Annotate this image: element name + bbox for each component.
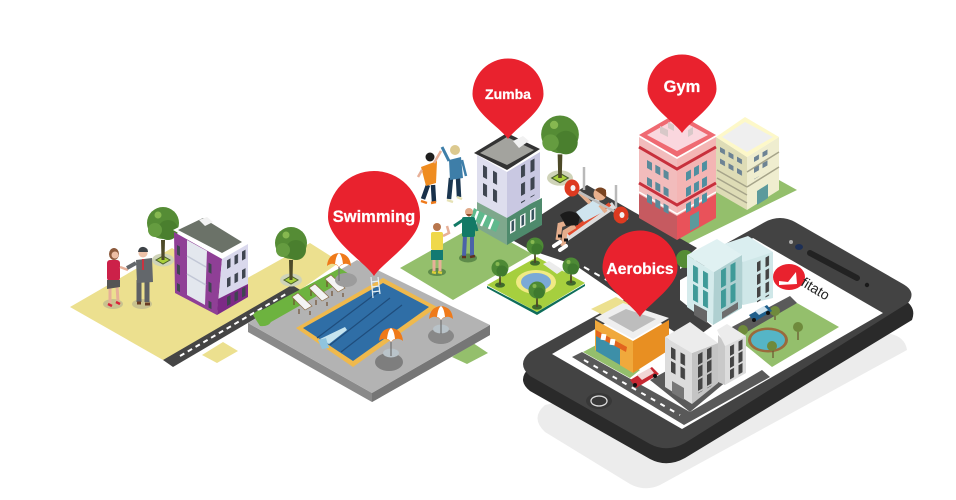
roof unit xyxy=(199,217,213,226)
pin: zumba: Zumba xyxy=(485,86,531,102)
shorts xyxy=(560,211,580,226)
pool water xyxy=(303,283,429,361)
deck sides xyxy=(248,323,490,402)
roof rim xyxy=(474,133,540,170)
pin: gym xyxy=(648,55,716,133)
upper right windows xyxy=(520,158,535,204)
bearded man in teal xyxy=(454,208,477,262)
store right wall xyxy=(633,320,669,373)
umbrella and table 2 xyxy=(428,306,454,344)
pin: aerobics xyxy=(602,231,678,317)
road: left street xyxy=(163,285,302,367)
right windows xyxy=(697,346,713,394)
roof xyxy=(173,215,248,257)
cream door xyxy=(757,184,768,205)
lane lines xyxy=(317,292,402,352)
torso xyxy=(576,197,603,222)
roof panels xyxy=(660,122,693,137)
left wall xyxy=(639,137,677,216)
gym right windows xyxy=(685,159,709,214)
ground: small yellow patch xyxy=(202,342,238,363)
door xyxy=(690,211,699,231)
left windows xyxy=(670,346,686,381)
tree by road xyxy=(275,227,307,286)
diving board xyxy=(318,327,347,349)
weight plates xyxy=(564,180,580,196)
store roof xyxy=(595,303,669,339)
dancer in orange xyxy=(418,151,441,203)
ground: yellow plot xyxy=(70,243,340,360)
yellow strip behind store xyxy=(591,297,630,316)
arms xyxy=(579,192,606,212)
roof xyxy=(480,137,534,165)
cream building xyxy=(716,117,779,210)
teal building rear xyxy=(718,236,773,305)
awning xyxy=(596,330,627,352)
screen map: gym lawn and pond xyxy=(730,296,839,367)
dancer in blue xyxy=(442,145,466,202)
umbrella and table 3 xyxy=(375,328,403,371)
tree behind zumba xyxy=(541,115,579,186)
fountain pond xyxy=(516,270,556,294)
tree left xyxy=(147,207,179,266)
pool rim xyxy=(296,278,437,367)
shop windows xyxy=(509,207,536,237)
park lawn xyxy=(487,257,585,312)
upper left wall xyxy=(477,155,507,218)
pin: swimming xyxy=(328,171,420,276)
logo xyxy=(773,264,833,303)
cream right windows xyxy=(753,147,771,180)
ladder xyxy=(371,277,380,298)
teal building front xyxy=(687,239,742,325)
blue car xyxy=(749,305,772,322)
head xyxy=(594,188,606,200)
park edge xyxy=(487,284,585,315)
bench frame xyxy=(566,205,614,238)
pin: gym: Gym xyxy=(664,78,700,96)
orange store xyxy=(595,303,669,373)
awning xyxy=(470,208,500,232)
gym left windows xyxy=(646,159,670,218)
cream left windows xyxy=(719,146,743,179)
rear windows xyxy=(756,255,770,303)
phone body xyxy=(523,218,913,463)
right wall xyxy=(677,137,716,216)
green hedge xyxy=(253,268,352,326)
upper right wall xyxy=(507,152,540,218)
stripes xyxy=(639,147,716,205)
umbrella and table 1 xyxy=(327,253,357,287)
home button xyxy=(586,393,612,409)
pin: swimming: Swimming xyxy=(333,208,415,226)
ground: green lawn centre xyxy=(400,224,532,300)
left windows xyxy=(692,264,709,312)
ground: green lawn behind gym xyxy=(640,175,797,244)
road: central dark plaza xyxy=(507,185,712,342)
man in yellow top xyxy=(428,223,449,276)
roof xyxy=(647,118,708,151)
store left wall xyxy=(595,320,633,373)
lower floor xyxy=(477,200,507,245)
purple building xyxy=(173,215,248,315)
bench xyxy=(543,261,563,274)
tree behind teal building xyxy=(676,250,694,268)
right face xyxy=(217,244,248,315)
phone face xyxy=(523,218,912,448)
phone side xyxy=(523,233,913,463)
right windows xyxy=(720,261,737,310)
pin: zumba xyxy=(472,58,544,139)
weightlifter on bench xyxy=(554,167,628,250)
deck top xyxy=(248,260,490,393)
upper left windows xyxy=(482,164,498,205)
ground: small green patch xyxy=(452,343,488,364)
roof rim xyxy=(639,113,716,157)
park xyxy=(487,238,585,315)
camera and speaker xyxy=(789,240,869,287)
pool deck xyxy=(248,260,490,402)
red car xyxy=(630,367,659,388)
loungers xyxy=(292,275,345,315)
rear windows xyxy=(729,339,743,380)
phone screen xyxy=(552,238,883,429)
pink gym building xyxy=(639,113,716,240)
right windows xyxy=(226,249,246,315)
red ground floor xyxy=(639,193,677,240)
left face xyxy=(174,232,222,315)
logo mark xyxy=(773,264,805,290)
rack posts xyxy=(584,167,616,220)
pin: aerobics: Aerobics xyxy=(606,261,674,278)
grey building rear xyxy=(717,324,746,385)
left windows xyxy=(176,244,213,310)
woman in red xyxy=(103,248,128,309)
zumba building xyxy=(470,133,542,245)
barbell xyxy=(572,188,628,219)
legs xyxy=(558,222,575,246)
logo word: fitato xyxy=(798,274,833,303)
grey building front xyxy=(665,322,718,404)
roof units xyxy=(513,136,529,148)
screen map: street xyxy=(572,343,770,425)
phone shadow xyxy=(538,333,907,488)
road lane markings xyxy=(584,267,626,291)
man in grey suit xyxy=(127,247,153,309)
